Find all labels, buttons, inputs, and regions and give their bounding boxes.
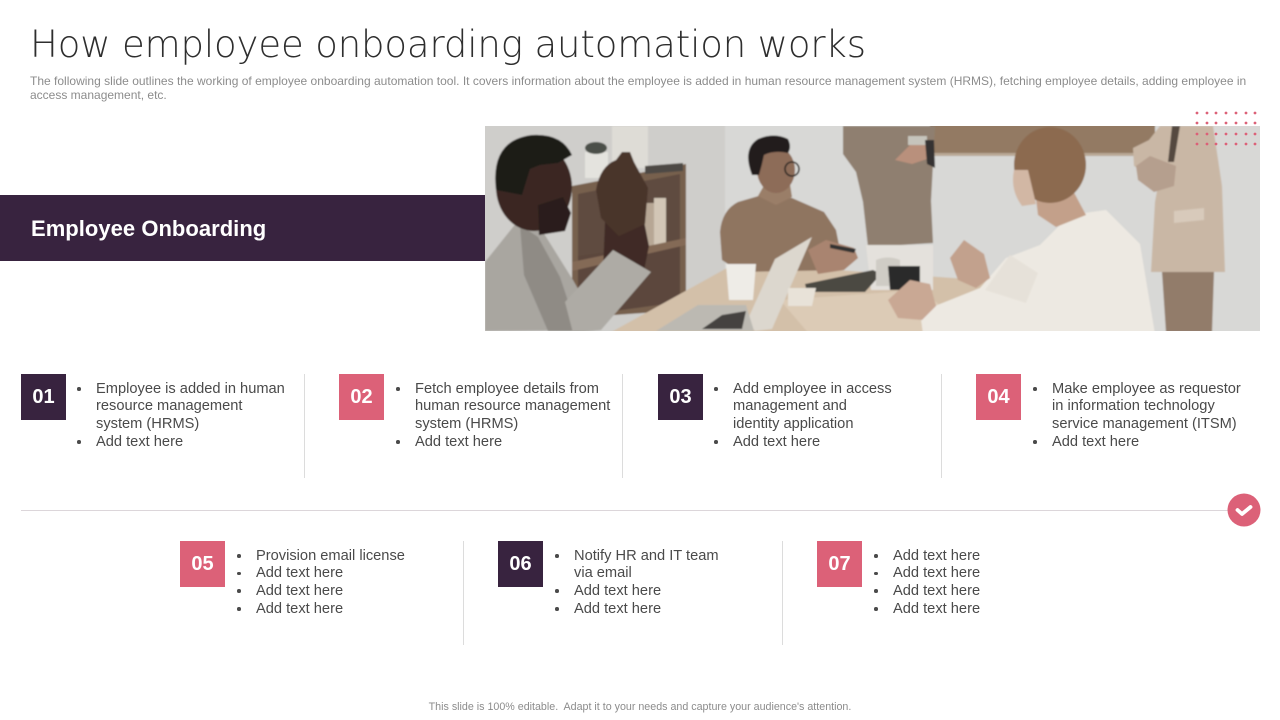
- step 04: in information technology: [1052, 398, 1215, 414]
- step 07: Add text here: [893, 548, 980, 564]
- subtitle: The following slide outlines the working of employee onboarding automation tool. It covers information about the employee is added in human resource management system (HRMS), fetching employee details, adding employee in: [30, 74, 1246, 88]
- subtitle: access management, etc.: [30, 88, 167, 102]
- step 03: management and: [733, 398, 847, 414]
- step 06: [498, 541, 719, 617]
- icon: check badge: [1228, 494, 1260, 526]
- decorative dot grid: [1196, 112, 1256, 146]
- cup, notebook and mugs: [726, 264, 756, 300]
- step 07: [817, 541, 980, 617]
- step 03: [658, 374, 892, 450]
- step 01: Add text here: [96, 434, 183, 450]
- step 04: Make employee as requestor: [1052, 381, 1241, 397]
- standing person right in beige jacket: [1133, 126, 1225, 272]
- shelf: [572, 164, 686, 318]
- step 01: resource management: [96, 398, 242, 414]
- step 03: Add employee in access: [733, 381, 892, 397]
- step 04: Add text here: [1052, 434, 1139, 450]
- banner: Employee Onboarding: Employee Onboarding: [31, 216, 266, 241]
- step 02: system (HRMS): [415, 416, 518, 432]
- step 06: 06: [509, 553, 532, 575]
- table: [612, 268, 986, 331]
- footer note: This slide is 100% editable. Adapt it to your needs and capture your audience's attention.: [429, 701, 851, 713]
- person in white sweater, seen from behind: [920, 210, 1155, 334]
- step 05: Add text here: [256, 583, 343, 599]
- standing person left: [843, 126, 935, 247]
- step 04: service management (ITSM): [1052, 416, 1237, 432]
- step 06: via email: [574, 565, 632, 581]
- man in glasses: [720, 195, 844, 272]
- step 03: Add text here: [733, 434, 820, 450]
- cork board: [930, 126, 1156, 154]
- step 01: [21, 374, 285, 450]
- step 02: Add text here: [415, 434, 502, 450]
- step 02: [339, 374, 610, 450]
- step 03: identity application: [733, 416, 853, 432]
- step 04: [976, 374, 1241, 450]
- step 06: Add text here: [574, 601, 661, 617]
- step 05: Add text here: [256, 565, 343, 581]
- banner: Employee Onboarding: [0, 195, 485, 261]
- step 05: 05: [191, 553, 214, 575]
- step 02: Fetch employee details from: [415, 381, 599, 397]
- vase and plant: [612, 126, 648, 168]
- photo: team meeting around a table: [485, 126, 1260, 331]
- step 07: Add text here: [893, 583, 980, 599]
- timeline divider: [21, 510, 1231, 511]
- step 05: Add text here: [256, 601, 343, 617]
- laptop: [747, 237, 812, 331]
- step 01: Employee is added in human: [96, 381, 285, 397]
- step 03: 03: [669, 386, 692, 408]
- man in grey blazer: [485, 224, 578, 331]
- step 07: Add text here: [893, 601, 980, 617]
- step 05: Provision email license: [256, 548, 405, 564]
- title: How employee onboarding automation works: [30, 23, 866, 66]
- step 05: [180, 541, 405, 617]
- step 06: Notify HR and IT team: [574, 548, 719, 564]
- step 02: human resource management: [415, 398, 610, 414]
- subtitle: [30, 74, 1246, 102]
- step 07: 07: [828, 553, 851, 575]
- step 07: Add text here: [893, 565, 980, 581]
- step 01: system (HRMS): [96, 416, 199, 432]
- step 01: 01: [32, 386, 55, 408]
- step 06: Add text here: [574, 583, 661, 599]
- step 02: 02: [350, 386, 373, 408]
- step 04: 04: [987, 386, 1010, 408]
